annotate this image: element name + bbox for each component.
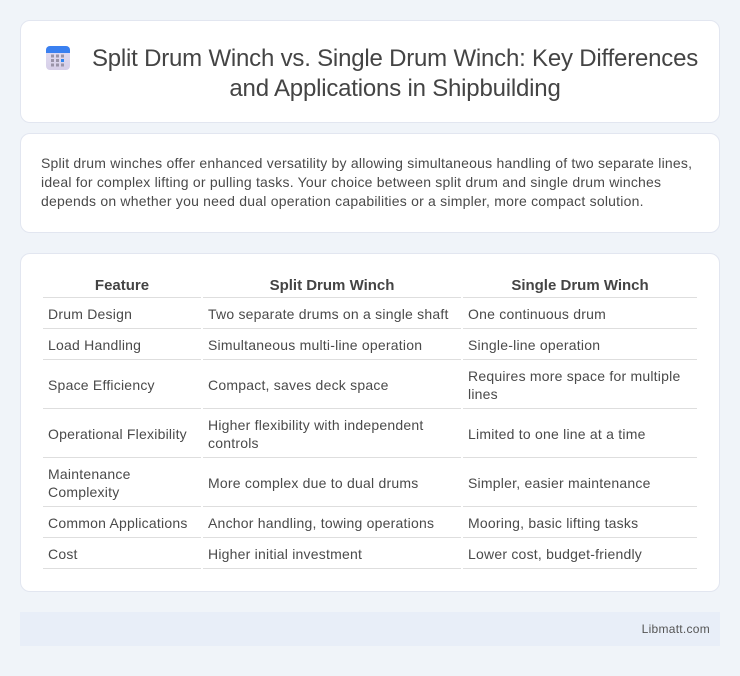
comparison table: Drum Design [48, 306, 132, 322]
comparison table: Lower cost, budget-friendly [468, 546, 642, 562]
comparison table: Load Handling [48, 337, 141, 353]
header row: Split Drum Winch [270, 277, 394, 294]
comparison table: lines [468, 386, 498, 402]
comparison table: Requires more space for multiple [468, 368, 680, 384]
comparison table: controls [208, 435, 259, 451]
icon: calendar grid [46, 46, 70, 70]
comparison table: Cost [48, 546, 78, 562]
comparison table: Limited to one line at a time [468, 426, 646, 442]
title: and Applications in Shipbuilding [229, 75, 561, 102]
footer bar [20, 612, 720, 646]
comparison table: Operational Flexibility [48, 426, 187, 442]
intro text: ideal for complex lifting or pulling tasks. Your choice between split drum and single drum winches [41, 174, 661, 190]
comparison table: Common Applications [48, 515, 188, 531]
title [92, 45, 698, 102]
intro text [41, 155, 692, 209]
comparison table: More complex due to dual drums [208, 475, 418, 491]
comparison table: Space Efficiency [48, 377, 155, 393]
comparison table: Complexity [48, 484, 119, 500]
header row [95, 277, 649, 294]
footer text: Libmatt.com [642, 622, 710, 636]
comparison table: Two separate drums on a single shaft [208, 306, 449, 322]
header row: Single Drum Winch [511, 277, 649, 294]
title: Split Drum Winch vs. Single Drum Winch: Key Differences [92, 45, 698, 72]
header row: Feature [95, 277, 149, 294]
comparison table: Anchor handling, towing operations [208, 515, 434, 531]
comparison table panel [20, 253, 720, 592]
intro text panel [20, 133, 720, 233]
intro text: depends on whether you need dual operation capabilities or a simpler, more compact solution. [41, 193, 644, 209]
comparison table: Single-line operation [468, 337, 600, 353]
comparison table: One continuous drum [468, 306, 606, 322]
comparison table [43, 277, 697, 569]
comparison table: Higher flexibility with independent [208, 417, 424, 433]
comparison table: Mooring, basic lifting tasks [468, 515, 638, 531]
comparison table: Simpler, easier maintenance [468, 475, 651, 491]
comparison table: Higher initial investment [208, 546, 362, 562]
title panel [20, 20, 720, 123]
comparison table: Simultaneous multi-line operation [208, 337, 422, 353]
comparison table: Compact, saves deck space [208, 377, 389, 393]
comparison table: Maintenance [48, 466, 131, 482]
intro text: Split drum winches offer enhanced versatility by allowing simultaneous handling of two separate lines, [41, 155, 692, 171]
